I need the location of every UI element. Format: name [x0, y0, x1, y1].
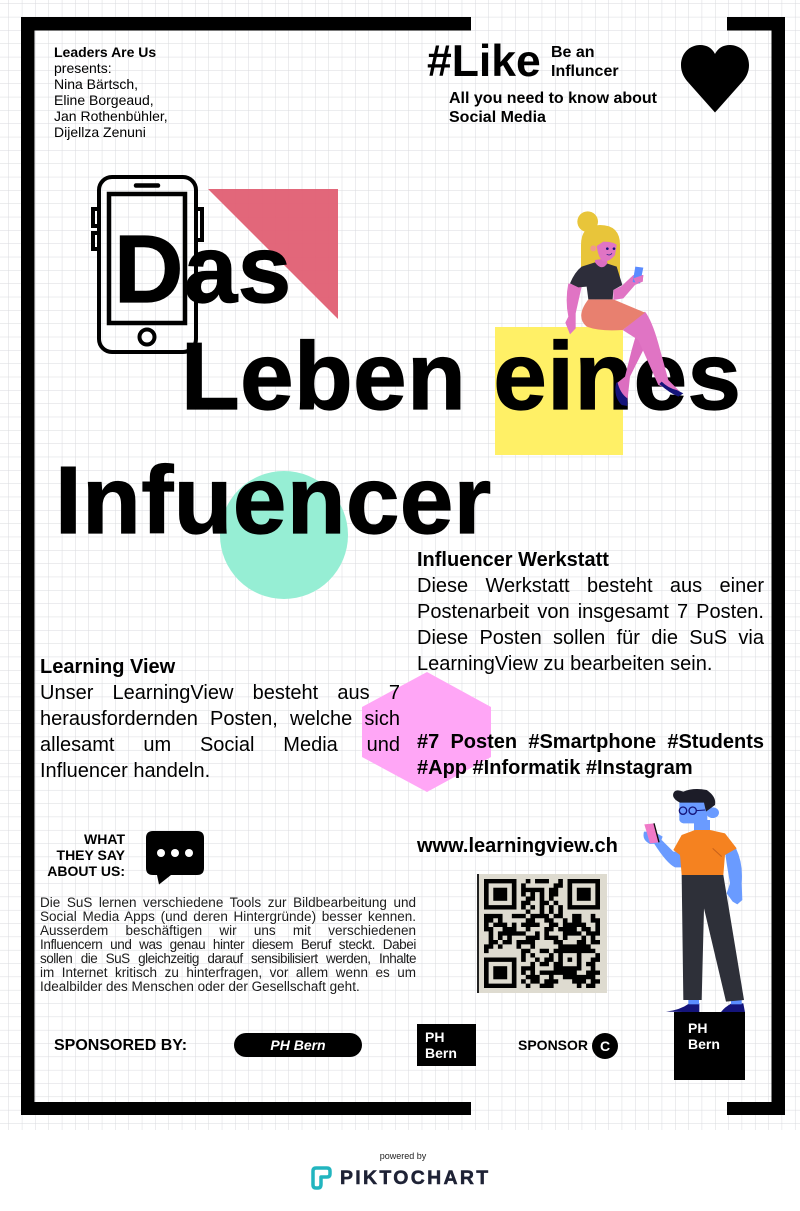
- title: Das: Das: [114, 216, 292, 323]
- text: presenters: [54, 44, 168, 140]
- text: presenters: Leaders Are Us: [54, 44, 156, 60]
- text: presenters: Eline Borgeaud,: [54, 92, 154, 108]
- text block: about the course: Influencern und was genau hinter diesem Beruf steckt. Dabei: [40, 937, 416, 952]
- text block: Influencer Werkstatt: Postenarbeit von insgesamt 7 Posten.: [417, 601, 764, 623]
- text: what they say about us: [47, 831, 125, 879]
- text: presenters: presents:: [54, 60, 112, 76]
- text block: Learning View: allesamt um Social Media und: [40, 734, 400, 756]
- sponsor badge: C: [592, 1033, 618, 1059]
- decorative shape: red triangle: [208, 189, 338, 319]
- text: website: www.learningview.ch: [417, 835, 618, 857]
- decorative shape: pink hexagon: [362, 672, 491, 792]
- icon: speech bubble: [146, 831, 204, 884]
- text: sponsored by: SPONSORED BY:: [54, 1037, 187, 1054]
- title: Leben eines: Leben eines: [181, 323, 741, 430]
- text block: about the course: Idealbilder des Menschen oder der Gesellschaft geht.: [40, 979, 360, 994]
- text block: Influencer Werkstatt: LearningView zu bearbeiten sein.: [417, 653, 712, 675]
- text: sponsor: SPONSOR: [518, 1037, 588, 1053]
- text block: Influencer Werkstatt: Diese Werkstatt besteht aus einer: [417, 575, 764, 597]
- text block: about the course: sollen die SuS gleichzeitig darauf sensibilisiert werden, Inhalte: [40, 951, 416, 966]
- icon: Piktochart mark: [311, 1166, 332, 1190]
- text: hashtags: #App #Informatik #Instagram: [417, 757, 693, 779]
- text block: about the course: Ausserdem beschäftigen wir uns mit verschiedenen: [40, 923, 416, 938]
- footer: Piktochart logo: [311, 1166, 490, 1190]
- text: presenters: Jan Rothenbühler,: [54, 108, 168, 124]
- text: what they say about us: WHAT: [84, 831, 125, 847]
- text: subtitle: [449, 90, 657, 126]
- decorative shape: mint circle: [220, 471, 348, 599]
- text block: Learning View: Unser LearningView besteht aus 7: [40, 682, 400, 704]
- text: subtitle: Social Media: [449, 109, 546, 126]
- sponsor badge: C: C: [600, 1038, 610, 1054]
- sponsor pill: PH Bern: PH Bern: [270, 1037, 326, 1053]
- text: presenters: Nina Bärtsch,: [54, 76, 138, 92]
- text: be an influencer: [551, 44, 619, 80]
- text block: Learning View: [40, 656, 400, 782]
- text block: Learning View: Learning View: [40, 656, 175, 678]
- text: be an influencer: Be an: [551, 44, 595, 61]
- text: hashtags: [417, 731, 764, 779]
- QR code: [477, 874, 607, 993]
- sponsor box: PH Bern: [417, 1024, 476, 1066]
- text block: Learning View: Influencer handeln.: [40, 760, 210, 782]
- text block: about the course: [40, 895, 416, 994]
- text block: Learning View: herausfordernden Posten, welche sich: [40, 708, 400, 730]
- decorative shape: yellow square: [495, 327, 623, 455]
- sponsor box: PH Bern large: [674, 1012, 745, 1080]
- sponsor box: PH Bern large: Bern: [688, 1036, 720, 1052]
- heading: #Like: #Like: [427, 37, 541, 86]
- text block: about the course: im Internet kritisch zu hinterfragen, vor allem wenn es um: [40, 965, 416, 980]
- illustration: sitting woman: [565, 211, 684, 406]
- text: presenters: Dijellza Zenuni: [54, 124, 146, 140]
- text: be an influencer: Influncer: [551, 63, 619, 80]
- sponsor box: PH Bern: PH: [425, 1029, 444, 1045]
- text: subtitle: All you need to know about: [449, 90, 657, 107]
- text block: about the course: Social Media Apps (und deren Hintergründe) besser kennen.: [40, 909, 416, 924]
- icon: smartphone: [91, 175, 204, 354]
- sponsor box: PH Bern: Bern: [425, 1045, 457, 1061]
- icon: heart: [681, 45, 749, 112]
- text: hashtags: #7 Posten #Smartphone #Students: [417, 731, 764, 753]
- text: Piktochart wordmark: PIKTOCHART: [340, 1167, 490, 1189]
- sponsor box: PH Bern large: PH: [688, 1020, 707, 1036]
- text block: Influencer Werkstatt: [417, 549, 764, 675]
- text block: Influencer Werkstatt: Diese Posten sollen für die SuS via: [417, 627, 764, 649]
- illustration: standing man: [644, 789, 745, 1012]
- title: Infuencer: Infuencer: [55, 447, 492, 554]
- text: what they say about us: ABOUT US:: [47, 863, 125, 879]
- sponsor pill: PH Bern: [234, 1033, 362, 1057]
- text: what they say about us: THEY SAY: [57, 847, 125, 863]
- text block: Influencer Werkstatt: Influencer Werkstatt: [417, 549, 609, 571]
- text block: about the course: Die SuS lernen verschiedene Tools zur Bildbearbeitung und: [40, 895, 416, 910]
- footer: powered by: powered by: [380, 1151, 426, 1161]
